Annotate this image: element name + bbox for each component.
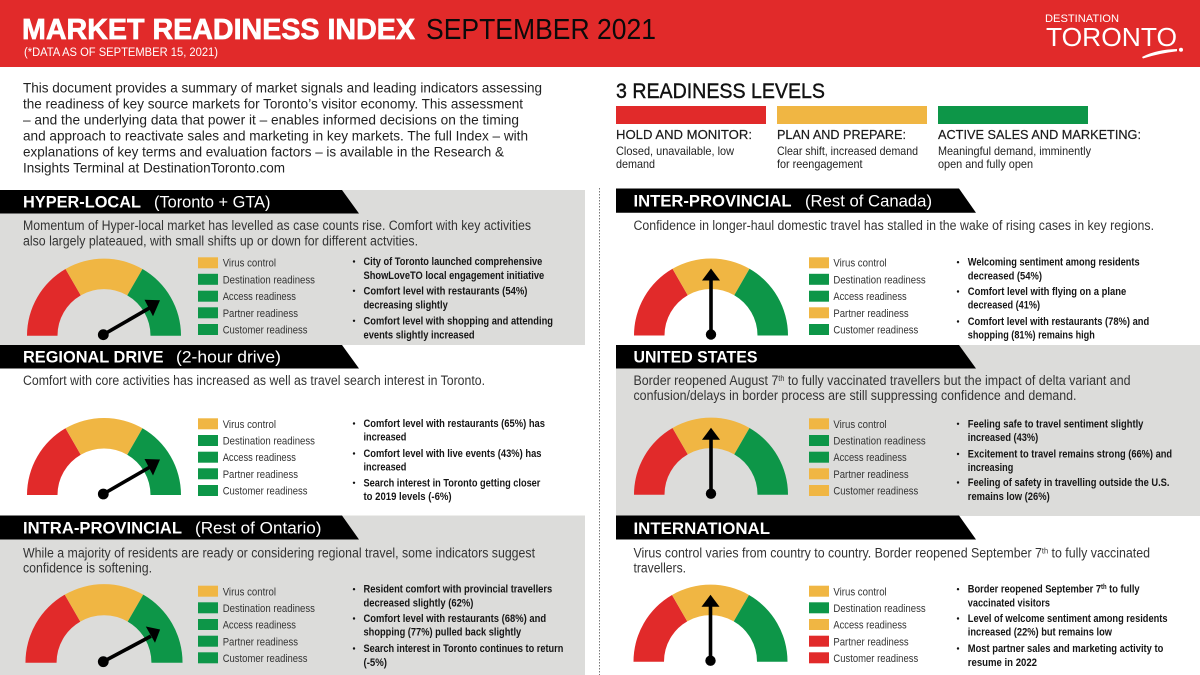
- intro text: the readiness of key source markets for Toronto’s visitor economy. This assessment: [23, 96, 523, 111]
- legend: Customer readiness: [833, 486, 919, 498]
- key points: Comfort level with restaurants (54%): [364, 285, 528, 297]
- heading: intra-provincial: [0, 516, 359, 540]
- key points: ShowLoveTO local engagement initiative: [364, 270, 544, 282]
- subtitle: data date: (*DATA AS OF SEPTEMBER 15, 2021): [24, 47, 218, 59]
- key points: Comfort level with restaurants (65%) has: [364, 418, 545, 430]
- panel: intra-provincial: [0, 516, 585, 675]
- legend: [198, 257, 315, 336]
- legend: Virus control: [223, 586, 276, 598]
- heading: regional drive: (2-hour drive): [176, 347, 281, 366]
- key points: Search interest in Toronto getting closer: [364, 477, 541, 489]
- intro text: explanations of key terms and evaluation factors – is available in the Research &: [23, 145, 504, 160]
- title: MARKET READINESS INDEX: [22, 14, 416, 46]
- level: hold and monitor: Closed, unavailable, low: [616, 144, 734, 158]
- legend: [809, 257, 926, 336]
- key points: increasing: [968, 462, 1013, 474]
- description: Confidence in longer-haul domestic travel has stalled in the wake of rising cases in key regions.: [634, 218, 1154, 233]
- key points: Feeling of safety in travelling outside the U.S.: [968, 477, 1170, 489]
- key points: increased: [364, 432, 406, 444]
- legend: Partner readiness: [223, 469, 298, 481]
- description: [634, 546, 1150, 576]
- heading: inter-provincial: INTER-PROVINCIAL: [634, 192, 792, 211]
- description: [634, 373, 1130, 403]
- logo: Destination Toronto: [1045, 13, 1183, 58]
- key points: Comfort level with shopping and attending: [364, 315, 553, 327]
- heading: united states: [616, 345, 976, 368]
- key points: [353, 584, 564, 669]
- key points: vaccinated visitors: [968, 597, 1050, 609]
- legend: Destination readiness: [223, 436, 315, 448]
- legend: Virus control: [223, 258, 276, 270]
- description: confusion/delays in border process are still suppressing confidence and demand.: [634, 388, 1076, 403]
- legend: Destination readiness: [223, 603, 315, 615]
- key points: Feeling safe to travel sentiment slightly: [968, 418, 1144, 430]
- intro text: [23, 80, 542, 176]
- title: [22, 14, 656, 46]
- legend: Access readiness: [833, 620, 907, 632]
- description: th: [1042, 547, 1048, 556]
- key points: [353, 256, 553, 341]
- key points: shopping (77%) pulled back slightly: [364, 627, 522, 639]
- legend: Partner readiness: [223, 308, 298, 320]
- level: plan and prepare: for reengagement: [777, 157, 863, 171]
- panel: united states: [616, 345, 1200, 516]
- heading: inter-provincial: [616, 188, 976, 213]
- heading: regional drive: REGIONAL DRIVE: [23, 347, 164, 366]
- description: confidence is softening.: [23, 561, 152, 576]
- gauge: active sales: [25, 584, 183, 667]
- logo: Destination Toronto: DESTINATION: [1045, 13, 1119, 25]
- legend: Destination readiness: [223, 274, 315, 286]
- legend: Customer readiness: [833, 324, 919, 336]
- key points: increased (22%) but remains low: [968, 627, 1112, 639]
- key points: Comfort level with restaurants (78%) and: [968, 316, 1149, 328]
- panel: regional drive: [0, 345, 545, 503]
- heading: international: [616, 516, 976, 540]
- key points: remains low (26%): [968, 491, 1050, 503]
- legend: Customer readiness: [223, 653, 308, 665]
- panel: inter-provincial: [616, 188, 1154, 342]
- panel: international: [616, 516, 1168, 669]
- description: Border reopened August 7: [634, 373, 790, 388]
- key points: (-5%): [364, 657, 387, 669]
- key points: Welcoming sentiment among residents: [968, 257, 1140, 269]
- legend: Partner readiness: [833, 636, 909, 648]
- legend: Customer readiness: [223, 324, 308, 336]
- heading: hyper-local: [0, 190, 359, 214]
- level: active sales and marketing: ACTIVE SALES AND MARKETING:: [938, 127, 1141, 142]
- key points: [957, 418, 1172, 503]
- legend: Customer readiness: [833, 653, 919, 665]
- intro text: This document provides a summary of market signals and leading indicators assessing: [23, 80, 542, 95]
- key points: increased: [364, 462, 406, 474]
- key points: events slightly increased: [364, 329, 475, 341]
- legend: Partner readiness: [833, 469, 909, 481]
- key points: City of Toronto launched comprehensive: [364, 256, 542, 268]
- legend: Virus control: [223, 419, 276, 431]
- key points: [957, 584, 1168, 669]
- legend: Virus control: [833, 586, 887, 598]
- description: [23, 218, 531, 248]
- legend: Partner readiness: [223, 636, 298, 648]
- description: [23, 546, 535, 576]
- heading: intra-provincial: INTRA-PROVINCIAL: [23, 518, 182, 537]
- key points: decreased (54%): [968, 270, 1042, 282]
- key points: decreased (41%): [968, 300, 1040, 312]
- key points: Comfort level with restaurants (68%) and: [364, 613, 546, 625]
- description: While a majority of residents are ready or considering regional travel, some indicators suggest: [23, 546, 535, 561]
- panel: 3 readiness levels: [616, 80, 1141, 171]
- key points: Comfort level with live events (43%) has: [364, 448, 542, 460]
- legend: Access readiness: [223, 452, 296, 464]
- title: SEPTEMBER 2021: [426, 14, 656, 46]
- gauge: active sales: [27, 259, 181, 340]
- description: Virus control varies from country to country. Border reopened September 7: [634, 546, 1075, 561]
- heading: hyper-local: (Toronto + GTA): [154, 192, 270, 211]
- legend: Virus control: [833, 419, 887, 431]
- header band: [0, 0, 1200, 67]
- legend: Access readiness: [223, 291, 296, 303]
- level: active sales and marketing: [938, 106, 1141, 171]
- level: active sales and marketing: Meaningful demand, imminently: [938, 144, 1091, 158]
- gauge: plan and prepare: [634, 258, 788, 340]
- legend: Partner readiness: [833, 308, 909, 320]
- description: also largely plateaued, with small shifts up or down for different actvities.: [23, 233, 418, 248]
- heading: hyper-local: HYPER-LOCAL: [23, 192, 141, 211]
- heading: united states: UNITED STATES: [634, 347, 758, 366]
- heading: inter-provincial: (Rest of Canada): [805, 192, 932, 211]
- key points: Border reopened September 7: [968, 584, 1126, 596]
- key points: Resident comfort with provincial travellers: [364, 584, 552, 596]
- legend: [809, 418, 926, 498]
- heading: 3 readiness levels: 3 READINESS LEVELS: [616, 80, 825, 103]
- level: hold and monitor: demand: [616, 157, 655, 171]
- key points: decreasing slightly: [364, 299, 449, 311]
- key points: resume in 2022: [968, 657, 1037, 669]
- description: th: [778, 374, 784, 383]
- description: travellers.: [634, 561, 686, 576]
- logo: Destination Toronto: TORONTO: [1046, 22, 1177, 52]
- key points: Search interest in Toronto continues to return: [364, 643, 564, 655]
- key points: to 2019 levels (-6%): [364, 491, 452, 503]
- gauge: plan and prepare: [634, 585, 788, 666]
- key points: to fully: [1107, 584, 1140, 596]
- level: plan and prepare: PLAN AND PREPARE:: [777, 127, 906, 142]
- gauge: active sales: [27, 418, 181, 499]
- heading: intra-provincial: (Rest of Ontario): [195, 518, 322, 537]
- level: plan and prepare: [777, 106, 927, 171]
- gauge: plan and prepare: [634, 418, 788, 499]
- level: hold and monitor: [616, 106, 766, 171]
- description: to fully vaccinated: [1048, 546, 1150, 561]
- key points: increased (43%): [968, 432, 1038, 444]
- legend: [809, 586, 926, 665]
- level: hold and monitor: HOLD AND MONITOR:: [616, 127, 752, 142]
- legend: Destination readiness: [833, 603, 926, 615]
- description: Momentum of Hyper-local market has levelled as case counts rise. Comfort with key activities: [23, 218, 531, 233]
- legend: [198, 586, 315, 665]
- legend: Destination readiness: [833, 436, 926, 448]
- key points: [957, 257, 1149, 342]
- legend: Access readiness: [223, 620, 296, 632]
- description: to fully vaccinated travellers but the impact of delta variant and: [784, 373, 1130, 388]
- legend: Destination readiness: [833, 274, 926, 286]
- key points: Level of welcome sentiment among residents: [968, 613, 1168, 625]
- intro text: – and the underlying data that power it – enables informed decisions on the timing: [23, 112, 519, 127]
- legend: Customer readiness: [223, 486, 308, 498]
- level: plan and prepare: Clear shift, increased demand: [777, 144, 918, 158]
- panel: hyper-local: [0, 190, 585, 345]
- intro text: Insights Terminal at DestinationToronto.com: [23, 161, 285, 176]
- key points: [353, 418, 545, 503]
- intro text: and approach to reactivate sales and marketing in key markets. The full Index – with: [23, 129, 528, 144]
- legend: Access readiness: [833, 291, 907, 303]
- level: active sales and marketing: open and fully open: [938, 157, 1033, 171]
- legend: [198, 418, 315, 498]
- key points: Most partner sales and marketing activity to: [968, 643, 1164, 655]
- heading: regional drive: [0, 345, 359, 368]
- description: Comfort with core activities has increased as well as travel search interest in Toronto.: [23, 373, 485, 388]
- key points: shopping (81%) remains high: [968, 330, 1095, 342]
- key points: th: [1101, 584, 1107, 591]
- heading: international: INTERNATIONAL: [634, 519, 770, 538]
- legend: Access readiness: [833, 452, 907, 464]
- legend: Virus control: [833, 258, 887, 270]
- key points: decreased slightly (62%): [364, 597, 474, 609]
- key points: Comfort level with flying on a plane: [968, 286, 1126, 298]
